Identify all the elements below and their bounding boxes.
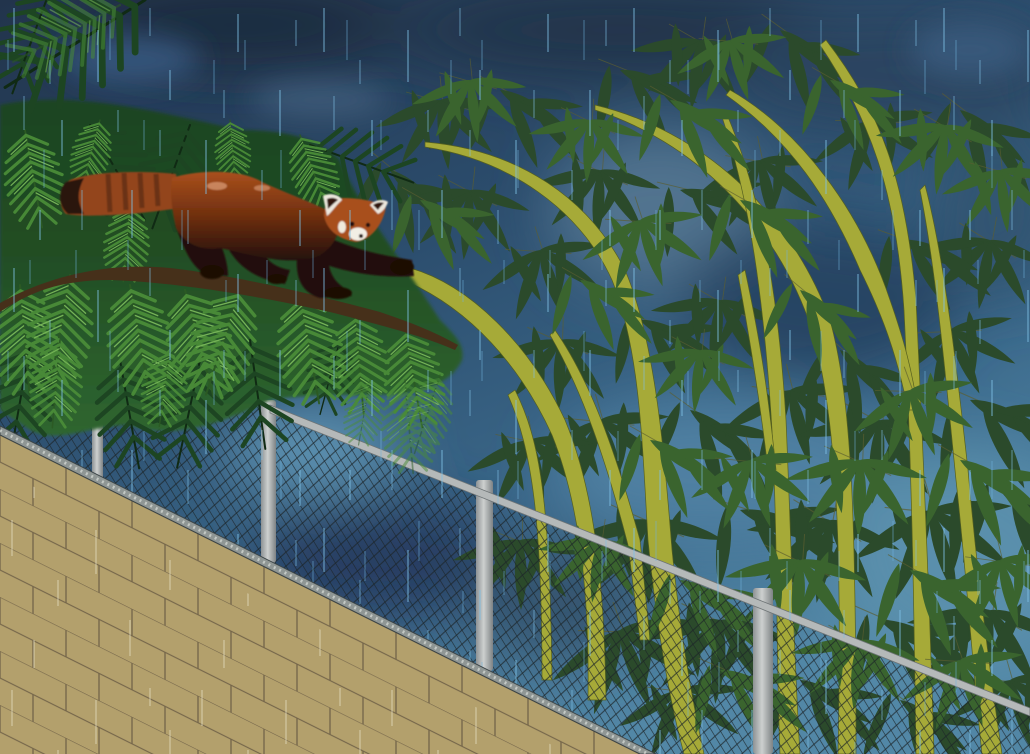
stem: long arching <box>425 142 704 754</box>
bamboo foliage behind the stems <box>340 1 1030 754</box>
stem: right tall <box>820 40 934 754</box>
wall face <box>0 435 640 754</box>
dark fronds <box>0 108 425 474</box>
branch under the red panda <box>0 267 458 350</box>
red panda <box>60 172 414 299</box>
stem: crossing arch <box>726 90 918 410</box>
head <box>323 194 388 242</box>
foliage hanging over the fence <box>340 368 463 476</box>
mesh <box>0 300 1030 754</box>
top rail <box>270 405 1030 716</box>
bamboo foliage in front of the stems <box>387 9 1030 754</box>
fir tree foliage at upper left <box>0 0 463 474</box>
stem: short front <box>508 390 552 680</box>
body <box>171 172 342 260</box>
rain streaks over the wall <box>0 470 570 754</box>
chain-link fence <box>0 300 1030 754</box>
stem: slender straight <box>721 110 800 754</box>
foliage mass <box>0 100 463 436</box>
stem: mid thin <box>738 270 776 470</box>
wall cap <box>0 426 656 754</box>
stem: far right <box>920 185 1002 754</box>
bamboo stems <box>408 40 1002 754</box>
stem: far left thin <box>550 330 650 640</box>
paws <box>200 259 414 299</box>
top-left corner fronds <box>0 0 171 129</box>
back highlights <box>207 182 227 190</box>
bright fronds <box>0 115 451 432</box>
fence posts <box>92 400 773 754</box>
block wall <box>0 426 656 754</box>
stem: upper middle arch <box>595 105 856 754</box>
tail <box>60 172 180 216</box>
stem: branch the panda reaches for <box>408 268 606 700</box>
legs <box>175 225 414 298</box>
